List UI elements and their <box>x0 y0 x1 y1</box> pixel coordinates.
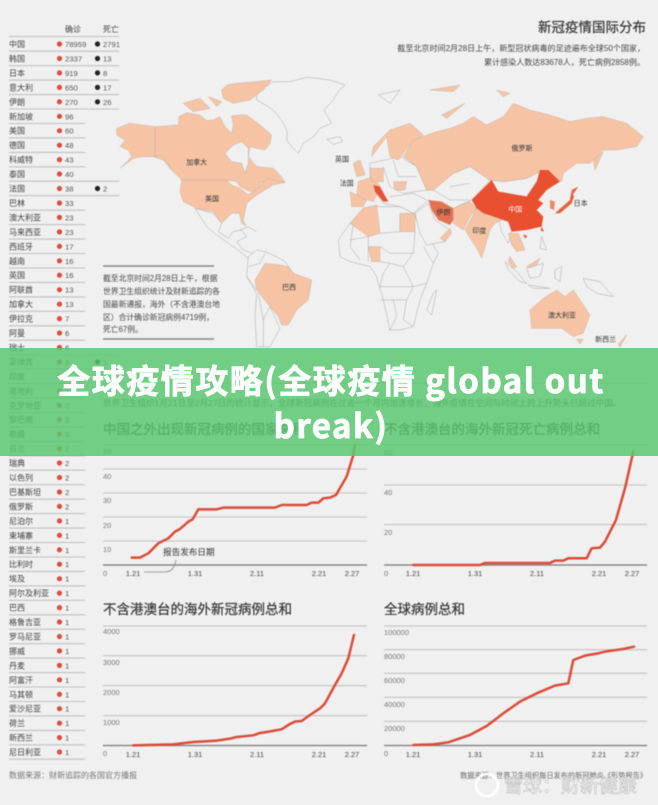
chart grid and axis labels: 10 <box>103 545 111 554</box>
countries: Gulf and Southeast Asia <box>440 228 540 268</box>
table rows: 中国 <box>9 39 25 49</box>
table rows: 芬兰 <box>9 444 25 454</box>
chart grid and axis labels: 1000 <box>103 718 120 727</box>
map labels: 伊朗 <box>436 208 450 217</box>
map summary text: 截至北京时间2月28日上午，新型冠状病毒的足迹遍布全球50个国家， <box>397 43 645 53</box>
map labels: 澳大利亚 <box>548 311 576 320</box>
line: overseas cases <box>133 635 354 745</box>
watermark text: 雪球：财新健康 <box>504 775 637 797</box>
table rows: 马其顿 <box>9 689 33 699</box>
map summary text: 累计感染人数达83678人，死亡病例2858例。 <box>484 57 645 67</box>
banner: title overlay: 全球疫情攻略(全球疫情 global out <box>57 355 605 403</box>
table rows: 2791 <box>103 40 120 49</box>
table rows: 2 <box>65 445 69 454</box>
chart grid and axis labels: 0 <box>103 569 107 578</box>
chart: overseas deaths <box>384 422 647 578</box>
table rows: 越南 <box>9 256 25 266</box>
table rows: 印度 <box>9 371 25 381</box>
note box: overseas totals: 死亡67例。 <box>103 324 143 334</box>
island: Madagascar <box>427 290 437 315</box>
table rows: 伊拉克 <box>9 314 33 324</box>
table rows: 希腊 <box>9 429 25 439</box>
chart title: 不含港澳台的海外新冠死亡病例总和 <box>384 422 600 437</box>
table rows: 6 <box>65 344 69 352</box>
table rows: 3 <box>65 387 69 396</box>
chart grid and axis labels: 2.27 <box>345 750 359 759</box>
chart grid and axis labels <box>103 626 367 759</box>
map labels: 美国 <box>205 194 219 203</box>
table rows: 6 <box>65 329 69 338</box>
table rows: 菲律宾 <box>9 357 33 367</box>
table rows: 7 <box>65 315 69 324</box>
table rows: 40 <box>65 170 74 179</box>
table rows: 2 <box>65 459 69 468</box>
table rows: 3 <box>65 372 69 381</box>
table rows: 美国 <box>9 126 25 136</box>
table rows: 俄罗斯 <box>9 501 33 511</box>
Africa outlines <box>338 207 438 330</box>
table: cases and deaths by country <box>9 24 120 759</box>
table rows: 泰国 <box>9 169 25 179</box>
chart grid and axis labels: 80000 <box>384 652 405 661</box>
chart title: 全球病例总和 <box>384 601 465 617</box>
chart grid and axis labels: 2.21 <box>312 569 326 578</box>
chart grid and axis labels: 2.21 <box>592 569 606 578</box>
table rows: 96 <box>65 112 74 121</box>
table rows: 13 <box>65 300 74 309</box>
table rows: 1 <box>65 690 69 699</box>
Europe, Middle East and Central Asia outlines <box>370 157 543 245</box>
table rows: 919 <box>65 69 78 78</box>
map: Europe, Africa, Asia and Oceania <box>186 85 643 347</box>
table rows: 38 <box>65 184 74 194</box>
country: China <box>472 170 560 239</box>
chart grid and axis labels: 2.11 <box>250 569 264 578</box>
chart grid and axis labels: 0 <box>103 749 107 758</box>
country: India <box>465 208 502 258</box>
table rows: 科威特 <box>9 155 33 165</box>
table rows: 1 <box>65 632 69 642</box>
table rows: 3 <box>65 358 69 367</box>
chart grid and axis labels: 40000 <box>384 700 405 709</box>
country: United States <box>180 178 285 226</box>
table rows: 17 <box>103 83 112 92</box>
country: Russia <box>403 103 643 190</box>
table rows: 3 <box>65 401 69 410</box>
country: Iran <box>428 200 453 225</box>
map labels <box>186 144 616 344</box>
source note: right: 数据来源：世界卫生组织每日发布的新冠肺炎《形势报告》 <box>460 771 647 780</box>
table rows <box>9 39 120 759</box>
table rows: 德国 <box>9 140 25 150</box>
map labels: 新西兰 <box>595 335 616 344</box>
note box: overseas totals: 区）合计确诊新冠病例4719例， <box>103 312 214 322</box>
table rows: 韩国 <box>9 54 25 64</box>
table rows: 阿联酋 <box>9 285 33 295</box>
annotation: report date <box>144 546 215 572</box>
table rows: 650 <box>65 83 78 92</box>
table rows: 爱沙尼亚 <box>9 705 41 714</box>
table rows: 巴林 <box>9 198 25 208</box>
table rows: 英国 <box>9 270 25 280</box>
note box: overseas totals <box>103 266 220 339</box>
chart grid and axis labels: 40 <box>384 488 392 497</box>
table rows: 埃及 <box>9 574 25 584</box>
chart grid and axis labels: 0 <box>384 569 388 578</box>
chart grid and axis labels: 3000 <box>103 658 120 667</box>
charts intro text: 世界卫生组织1月21日至2月27日的统计显示，全球新冠病例在过去一个月内加速增长，海外疫情在空间与时间上的上升势头已超过中国。 <box>103 397 622 408</box>
table rows: 罗马尼亚 <box>9 632 41 642</box>
chart grid and axis labels: 2.11 <box>530 569 544 578</box>
chart grid and axis labels: 1.31 <box>468 569 482 578</box>
country: New Zealand <box>618 335 627 347</box>
South America outlines <box>247 250 293 347</box>
country: Canada <box>155 80 285 192</box>
country: Mexico and Central America <box>195 208 253 258</box>
chart grid and axis labels: 2.21 <box>312 750 326 759</box>
table rows: 1 <box>65 604 69 613</box>
countries: Western Europe <box>350 123 423 207</box>
table rows: 2 <box>65 474 69 482</box>
map labels: 日本 <box>574 199 588 208</box>
table rows: 格鲁吉亚 <box>9 617 41 627</box>
map labels: 俄罗斯 <box>512 144 532 153</box>
table rows: 16 <box>65 257 74 266</box>
chart grid and axis labels: 1.21 <box>126 569 140 578</box>
table rows: 1 <box>65 531 69 540</box>
table rows: 柬埔寨 <box>9 530 33 540</box>
table rows: 1 <box>65 705 69 714</box>
countries: North Africa and Nigeria <box>350 205 415 262</box>
chart grid and axis labels <box>103 445 367 578</box>
table rows: 1 <box>65 575 69 584</box>
chart grid and axis labels: 20000 <box>384 724 405 733</box>
source note: left: 数据来源：财新追踪的各国官方播报 <box>9 770 137 780</box>
map summary text <box>397 43 645 67</box>
table rows: 1 <box>65 748 69 757</box>
country: Italy <box>373 185 388 202</box>
table rows: 33 <box>65 199 74 208</box>
table rows: 澳大利亚 <box>9 212 41 222</box>
table rows: 2 <box>65 488 69 497</box>
table rows: 日本 <box>9 68 25 78</box>
table rows: 43 <box>65 156 74 165</box>
note box: overseas totals: 世界卫生组织统计及财新追踪的各 <box>103 286 220 296</box>
chart grid and axis labels: 1.21 <box>406 750 420 759</box>
table rows: 1 <box>103 358 107 367</box>
map labels: 英国 <box>335 155 349 164</box>
table rows: 瑞士 <box>9 342 25 352</box>
table rows: 黎巴嫩 <box>9 415 33 425</box>
country: Japan <box>555 187 578 213</box>
Kamchatka and northern islands <box>378 85 603 170</box>
chart grid and axis labels: 0 <box>384 749 388 758</box>
map labels: 法国 <box>340 178 354 187</box>
heading: 新冠疫情国际分布: 新冠疫情国际分布 <box>538 20 646 35</box>
table rows: 1 <box>65 517 69 526</box>
watermark logo <box>476 774 498 796</box>
note box: overseas totals: 截至北京时间2月28日上午，根据 <box>103 273 218 283</box>
chart grid and axis labels: 2.27 <box>345 569 359 578</box>
table rows: 60 <box>65 127 74 136</box>
countries: Afghanistan and Pakistan <box>453 202 477 230</box>
table rows: 1 <box>65 546 69 555</box>
chart: overseas cases <box>103 602 367 759</box>
table rows: 48 <box>65 141 74 150</box>
table rows: 尼日利亚 <box>9 747 41 757</box>
chart grid and axis labels: 1.31 <box>468 750 482 759</box>
chart: countries outside China <box>103 421 367 578</box>
line: overseas deaths <box>413 452 633 565</box>
table rows: 意大利 <box>9 82 33 92</box>
country: Alaska <box>117 123 172 170</box>
table header <box>9 24 119 36</box>
table rows: 比利时 <box>9 559 33 569</box>
chart grid and axis labels: 1.31 <box>188 750 202 759</box>
country: Australia <box>530 290 590 337</box>
table rows: 16 <box>65 271 74 280</box>
table rows: 新西兰 <box>9 733 33 743</box>
chart grid and axis labels: 40 <box>103 472 111 481</box>
table rows: 17 <box>65 242 74 251</box>
chart: global cases <box>384 601 647 759</box>
table header: 死亡 <box>103 24 119 34</box>
chart grid and axis labels: 100000 <box>384 628 409 637</box>
line: global cases <box>413 647 634 745</box>
table rows: 1 <box>65 589 69 598</box>
table rows: 13 <box>65 286 74 295</box>
table rows: 斯里兰卡 <box>9 545 41 555</box>
table rows: 阿曼 <box>9 329 25 338</box>
table rows: 克罗地亚 <box>9 400 41 410</box>
table rows: 法国 <box>9 184 25 194</box>
table rows: 巴基斯坦 <box>9 487 41 497</box>
world map <box>117 77 643 347</box>
table rows: 尼泊尔 <box>9 516 33 526</box>
table rows: 2 <box>103 184 107 194</box>
banner: title overlay: break) <box>274 400 388 448</box>
chart grid and axis labels <box>384 445 647 578</box>
table rows: 78959 <box>65 40 86 49</box>
chart grid and axis labels: 2.21 <box>592 750 606 759</box>
country: Iceland <box>327 137 343 144</box>
chart grid and axis labels: 1.31 <box>188 569 202 578</box>
table rows: 2 <box>65 502 69 511</box>
map labels: 加拿大 <box>186 157 207 166</box>
table rows: 阿尔及利亚 <box>9 588 49 598</box>
chart grid and axis labels: 4000 <box>103 627 120 636</box>
table rows: 3 <box>65 416 69 425</box>
chart grid and axis labels: 1.21 <box>406 569 420 578</box>
table rows: 瑞典 <box>9 458 25 468</box>
table rows: 2337 <box>65 54 82 64</box>
banner: title overlay <box>0 348 658 456</box>
table rows: 1 <box>65 661 69 670</box>
chart grid and axis labels <box>384 626 647 759</box>
map labels: 印度 <box>472 226 486 235</box>
chart grid and axis labels: 2.27 <box>625 569 639 578</box>
table rows: 以色列 <box>9 472 33 482</box>
country: Greenland <box>257 77 345 153</box>
country: South Korea <box>550 200 555 210</box>
chart grid and axis labels: 60000 <box>384 676 405 685</box>
table rows: 1 <box>65 647 69 656</box>
note box: overseas totals: 国最新通报，海外（不含港澳台地 <box>103 299 220 309</box>
map labels: 巴西 <box>282 284 296 292</box>
table rows: 伊朗 <box>9 97 25 107</box>
table rows: 13 <box>103 54 112 64</box>
map labels: 中国 <box>508 204 522 213</box>
line: country count <box>132 445 355 558</box>
table rows: 270 <box>65 98 78 107</box>
chart grid and axis labels: 50 <box>103 447 111 456</box>
chart grid and axis labels: 60 <box>384 448 392 457</box>
table rows: 1 <box>65 719 69 728</box>
chart grid and axis labels: 30 <box>103 496 111 505</box>
table rows: 26 <box>103 98 112 107</box>
table header: 确诊 <box>65 24 81 34</box>
chart grid and axis labels: 2.11 <box>530 750 544 759</box>
table rows: 阿富汗 <box>9 675 33 685</box>
chart grid and axis labels: 2000 <box>103 688 120 697</box>
chart grid and axis labels: 1.21 <box>126 750 140 759</box>
country: Brazil <box>255 263 312 325</box>
table rows: 1 <box>65 560 69 569</box>
table rows: 马来西亚 <box>9 228 41 237</box>
annotation: report date: 报告发布日期 <box>163 546 215 557</box>
table rows: 1 <box>65 734 69 743</box>
watermark: Xueqiu Caixin Health <box>476 774 637 797</box>
table rows: 加拿大 <box>9 299 33 309</box>
Tasmania <box>577 339 583 344</box>
table rows: 巴西 <box>9 604 25 613</box>
Indonesia and Philippines outlines <box>505 237 613 297</box>
chart grid and axis labels: 20 <box>384 528 392 537</box>
chart title: 中国之外出现新冠病例的国家总和 <box>103 421 306 437</box>
table rows: 荷兰 <box>9 718 25 728</box>
table rows: 西班牙 <box>9 241 33 251</box>
map: the Americas <box>117 77 345 347</box>
table rows: 奥地利 <box>9 386 33 396</box>
table rows: 1 <box>65 618 69 627</box>
Caribbean islands <box>240 227 257 232</box>
table rows: 挪威 <box>9 646 25 656</box>
table rows: 23 <box>65 213 74 222</box>
table rows: 1 <box>65 676 69 685</box>
table rows: 8 <box>103 69 107 78</box>
table rows: 3 <box>65 430 69 439</box>
chart grid and axis labels: 2.27 <box>625 750 639 759</box>
chart grid and axis labels: 2.11 <box>250 750 264 759</box>
chart grid and axis labels: 20 <box>103 521 111 530</box>
table rows: 23 <box>65 228 74 237</box>
chart title: 不含港澳台的海外新冠病例总和 <box>103 602 292 617</box>
table rows: 丹麦 <box>9 660 25 670</box>
table rows: 新加坡 <box>9 111 33 121</box>
